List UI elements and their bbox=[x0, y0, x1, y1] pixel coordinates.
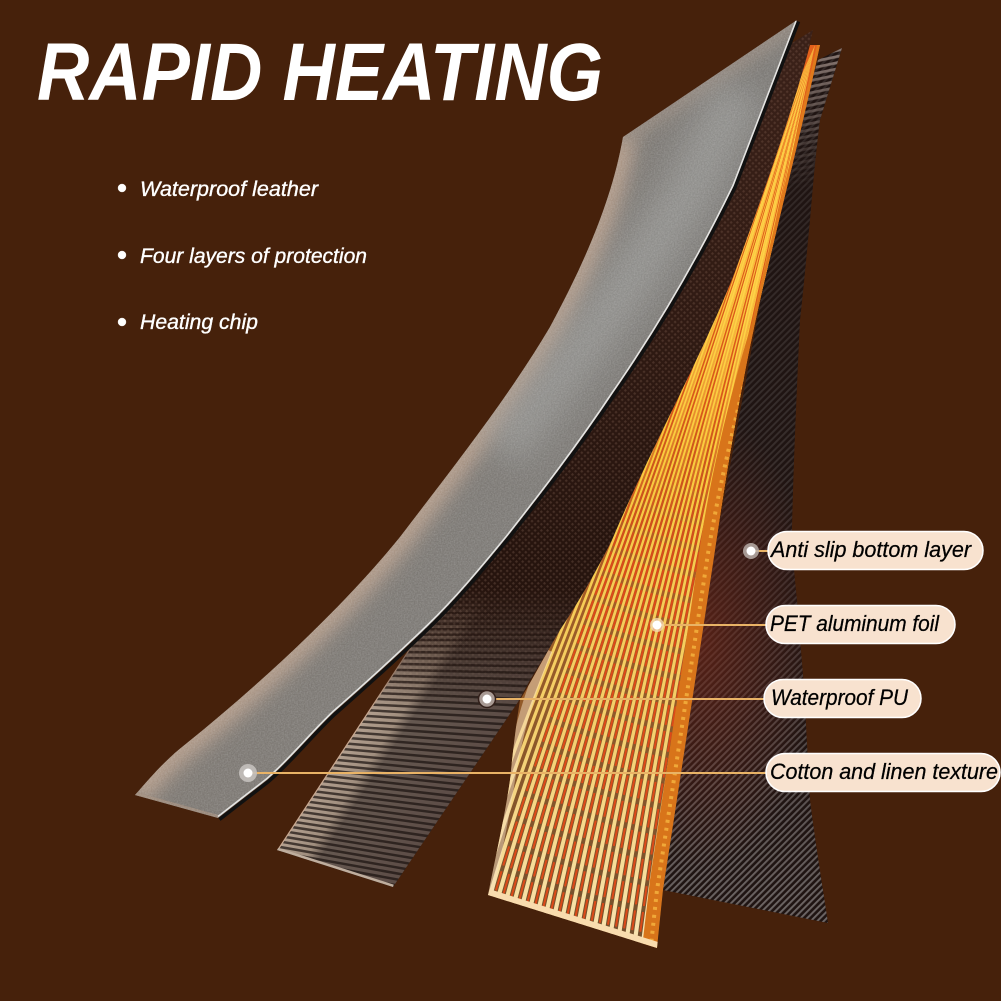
callout: PET aluminum foil bbox=[650, 606, 955, 644]
label pill: anti slip bbox=[768, 532, 983, 570]
label pill: anti slip: Anti slip bottom layer bbox=[769, 537, 973, 562]
feature: four layers: Four layers of protection bbox=[140, 245, 367, 268]
layer: PET aluminum foil bbox=[464, 40, 825, 955]
foil edge band bbox=[642, 287, 763, 948]
marker: anti slip bbox=[743, 543, 759, 559]
marker: PU bbox=[478, 690, 496, 708]
feature: waterproof leather: Waterproof leather bbox=[140, 178, 319, 201]
callout: cotton and linen texture bbox=[239, 754, 1000, 792]
label pill: PET bbox=[766, 606, 955, 644]
layer: waterproof PU bbox=[277, 30, 813, 887]
feature: heating chip: Heating chip bbox=[140, 311, 258, 334]
callout: waterproof PU bbox=[478, 680, 921, 718]
label pill: cotton: Cotton and linen texture bbox=[770, 759, 998, 784]
marker: cotton bbox=[239, 764, 257, 782]
label pill: PU bbox=[764, 680, 921, 718]
label pill: cotton bbox=[766, 754, 1000, 792]
layer: waterproof leather bbox=[130, 15, 800, 825]
label pill: PU: Waterproof PU bbox=[771, 685, 908, 710]
label pill: PET: PET aluminum foil bbox=[770, 611, 940, 636]
title: RAPID HEATING bbox=[37, 27, 603, 118]
layer: anti slip bottom bbox=[663, 48, 842, 923]
callout: anti slip bottom layer bbox=[743, 532, 983, 570]
marker: PET bbox=[650, 618, 664, 632]
feature list bbox=[118, 178, 367, 334]
